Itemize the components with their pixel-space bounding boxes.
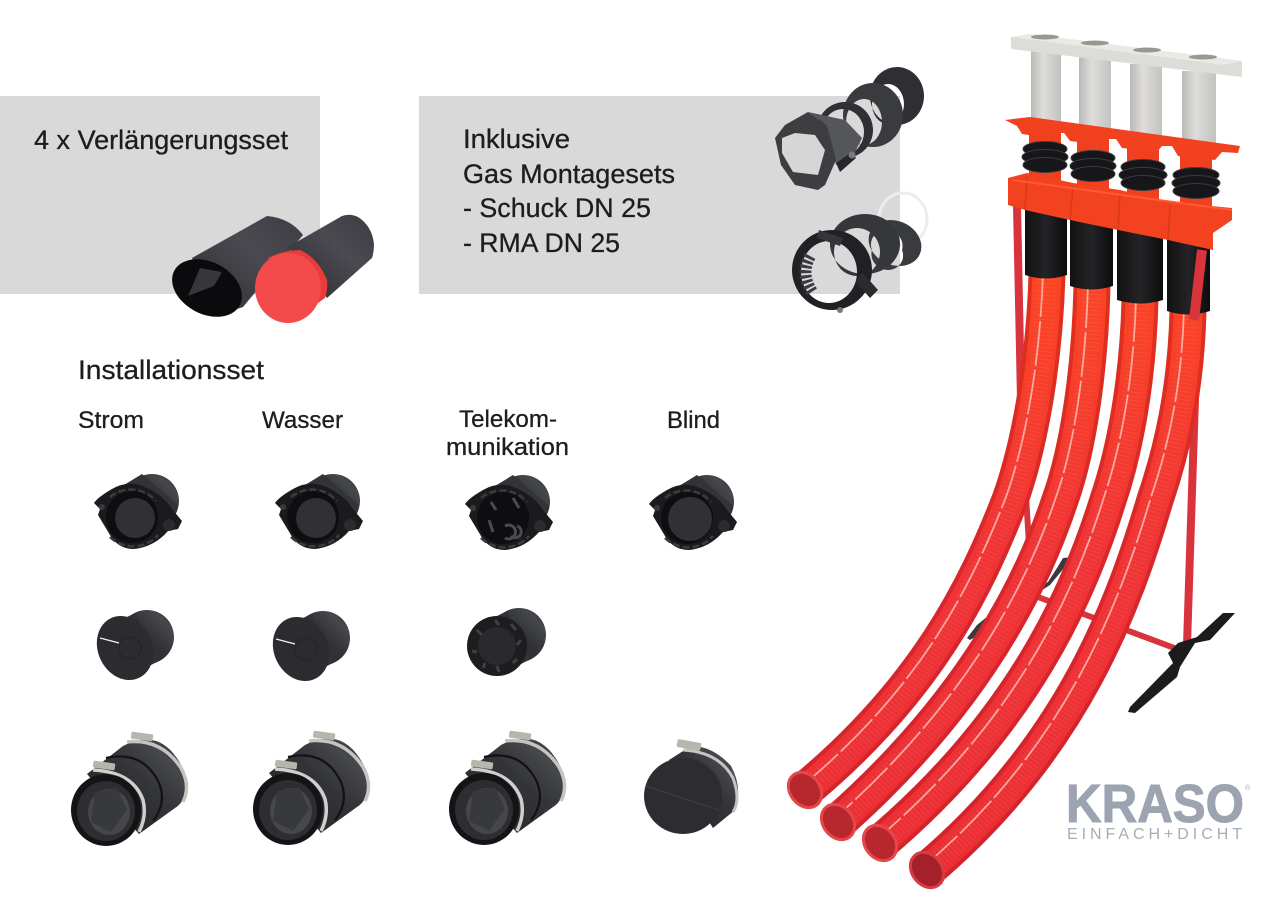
icon: Strom coupler bbox=[71, 732, 187, 846]
red lower block bbox=[1008, 173, 1232, 250]
column labels bbox=[78, 406, 720, 461]
icon: Telekommunikation clamp bbox=[465, 475, 553, 550]
image: conduit 4 bbox=[903, 308, 1188, 894]
right foot bbox=[1128, 613, 1235, 713]
black sleeves bbox=[1025, 205, 1210, 314]
grey pipes bbox=[1031, 50, 1216, 152]
heading: 4 x Verlängerungsset: 4 x Verlängerungsset bbox=[34, 125, 288, 155]
text: gas set list: - RMA DN 25 bbox=[463, 228, 620, 258]
column labels: munikation bbox=[446, 434, 569, 461]
image: conduit 3 bbox=[856, 297, 1140, 867]
column labels: Wasser bbox=[262, 407, 343, 434]
image: stand behind conduits bbox=[967, 205, 1235, 713]
heading: Installationsset: Installationsset bbox=[78, 355, 265, 385]
icon: Telekommunikation plug bbox=[467, 608, 546, 676]
stand rods bbox=[1017, 205, 1200, 652]
left open sleeve bbox=[162, 216, 303, 328]
panel: Verlängerungsset background bbox=[0, 96, 320, 294]
image: RMA gas mounting set bbox=[792, 193, 927, 313]
text: gas set list bbox=[463, 124, 675, 258]
icon: Wasser plug bbox=[263, 608, 350, 690]
icon: Telekommunikation coupler bbox=[449, 731, 565, 845]
image: conduit 1 bbox=[781, 272, 1047, 814]
column labels: Strom bbox=[78, 407, 144, 434]
logo: KRASO: EINFACH+DICHT bbox=[1067, 826, 1242, 843]
text: gas set list: - Schuck DN 25 bbox=[463, 193, 651, 223]
image: Schuck gas mounting set bbox=[775, 67, 924, 190]
image: top of house-entry assembly bbox=[1005, 34, 1242, 320]
bellows bbox=[1022, 142, 1220, 198]
panel: Gas Montagesets background bbox=[419, 96, 900, 294]
image: conduit 2 bbox=[814, 283, 1092, 846]
text: gas set list: Inklusive bbox=[463, 124, 570, 154]
icon: Strom plug bbox=[87, 607, 174, 689]
column labels: Blind bbox=[667, 407, 720, 434]
icon: Wasser coupler bbox=[253, 731, 369, 845]
icon: Blind clamp bbox=[649, 475, 737, 550]
icon: Blind coupler with closed end bbox=[644, 739, 738, 834]
logo: KRASO: ® bbox=[1245, 784, 1251, 792]
column labels: Telekom- bbox=[459, 406, 557, 433]
logo: KRASO: KRASO bbox=[1066, 774, 1244, 834]
front rod bbox=[1194, 250, 1202, 320]
image: extension sleeves with red cap bbox=[162, 215, 374, 328]
icon: Strom clamp bbox=[94, 474, 182, 549]
left foot bbox=[967, 557, 1073, 640]
right tube with red cap bbox=[255, 215, 374, 323]
grey top bar bbox=[1011, 34, 1242, 77]
red upper plate bbox=[1005, 117, 1240, 160]
icon: Wasser clamp bbox=[275, 474, 363, 549]
text: gas set list: Gas Montagesets bbox=[463, 159, 675, 189]
orange necks bbox=[1029, 130, 1212, 216]
